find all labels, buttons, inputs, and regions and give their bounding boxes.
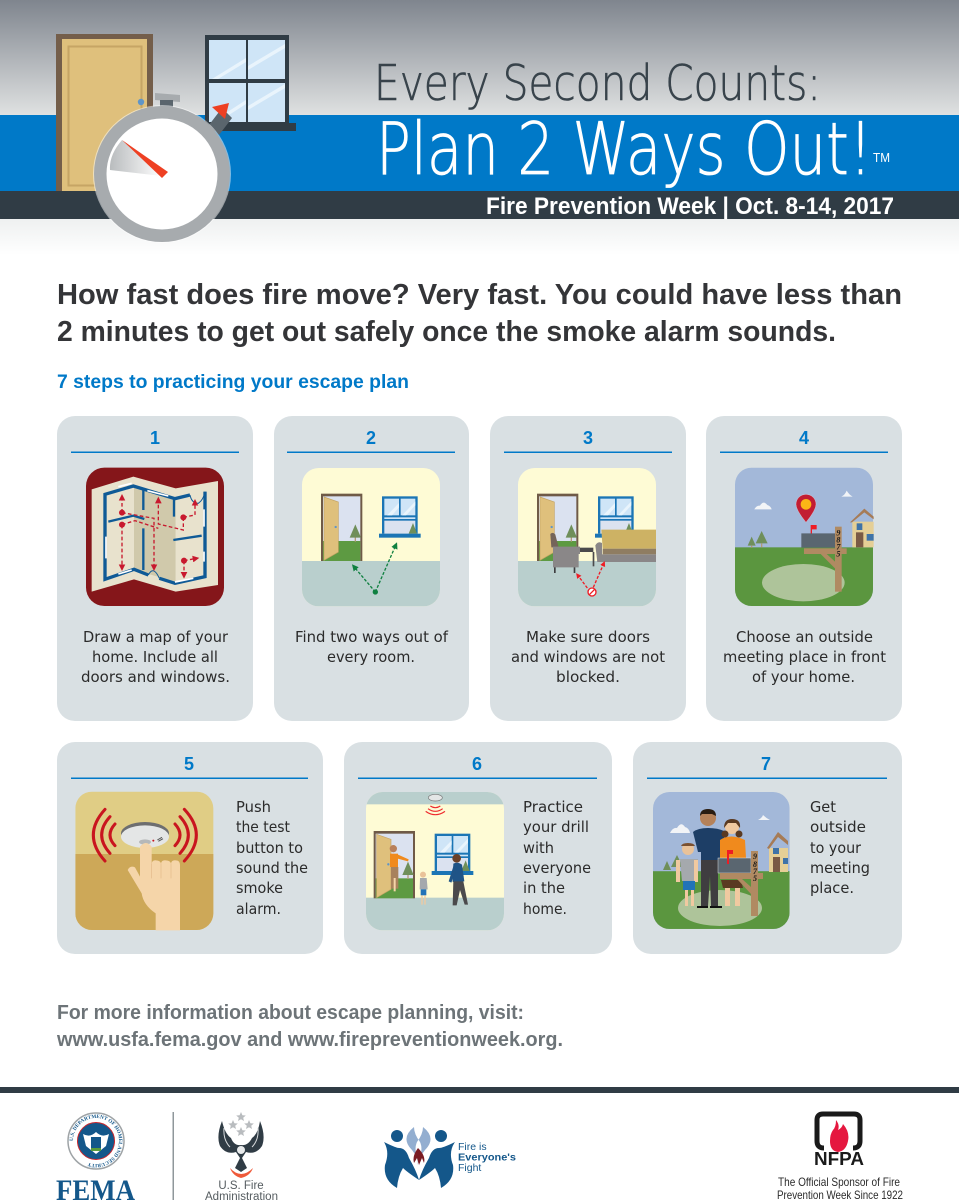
step 1 text xyxy=(81,628,230,686)
logo: DHS seal and FEMA: U.S. DEPARTMENT OF HOMELAND SECURITY xyxy=(70,1114,122,1168)
step 1 text: Draw a map of your xyxy=(83,628,229,646)
logo: Fire is Everyone's Fight: Fire is xyxy=(458,1141,487,1153)
title: Every Second Counts: xyxy=(374,55,821,112)
panel: step 5: 5 xyxy=(184,754,194,774)
step 7 text: meeting xyxy=(810,859,870,877)
icon: family at meeting place: 9 xyxy=(753,852,757,861)
step 6 text: Practice xyxy=(523,798,583,816)
step 7 text: to your xyxy=(810,839,862,857)
title xyxy=(374,55,890,191)
step 4 text: of your home. xyxy=(752,668,855,686)
step 3 text: blocked. xyxy=(556,668,620,686)
step 4 text: Choose an outside xyxy=(736,628,873,646)
more information text: www.usfa.fema.gov and www.firepreventionweek.org. xyxy=(56,1028,563,1051)
step 4 text xyxy=(723,628,886,686)
father xyxy=(701,860,718,906)
panel: step 7 xyxy=(633,742,902,954)
panel: step 6 xyxy=(344,742,612,954)
logo divider xyxy=(172,1112,174,1200)
panel: step 5 xyxy=(57,742,323,954)
logo: Fire is Everyone's Fight: Everyone's xyxy=(458,1152,516,1164)
icon: family at meeting place: 7 xyxy=(753,867,758,876)
intro text: How fast does fire move? Very fast. You could have less than xyxy=(57,279,902,311)
date banner: Fire Prevention Week | Oct. 8-14, 2017 xyxy=(486,193,894,220)
panel: step 4: 4 xyxy=(799,428,809,448)
icon: stopwatch with arrow xyxy=(93,93,232,243)
logo: U.S. Fire Administration: U.S. Fire xyxy=(218,1180,264,1192)
step 7 text xyxy=(810,798,870,897)
panel: step 7: 7 xyxy=(761,754,771,774)
logo: Fire is Everyone's Fight: Fight xyxy=(458,1162,481,1174)
step 6 text: your drill xyxy=(523,818,589,836)
icon: meeting place: 7 xyxy=(836,543,841,552)
step 2 text xyxy=(295,628,449,666)
mother xyxy=(721,880,743,888)
step 2 text: Find two ways out of xyxy=(295,628,449,646)
step 6 text: with xyxy=(523,839,554,857)
intro text: 2 minutes to get out safely once the smoke alarm sounds. xyxy=(57,316,836,348)
icon: smoke alarm test xyxy=(75,792,215,930)
step 1 text: doors and windows. xyxy=(81,668,230,686)
step 5 text: smoke xyxy=(236,879,283,897)
header background xyxy=(0,0,959,255)
logo: U.S. Fire Administration xyxy=(205,1112,278,1200)
panel: step 2: 2 xyxy=(366,428,376,448)
footer rule xyxy=(0,1087,959,1093)
step 3 text: and windows are not xyxy=(511,648,665,666)
subheading: 7 steps to practicing your escape plan xyxy=(57,371,409,393)
logo: NFPA: The Official Sponsor of Fire xyxy=(778,1175,900,1189)
icon: meeting place: 5 xyxy=(836,550,840,559)
logo: NFPA: NFPA xyxy=(814,1149,864,1169)
son xyxy=(682,843,694,855)
icon: room with two exits xyxy=(302,468,440,606)
panel: step 6: 6 xyxy=(472,754,482,774)
logo: DHS seal and FEMA xyxy=(56,1112,135,1200)
icon: door xyxy=(56,34,153,191)
panel: step 3: 3 xyxy=(583,428,593,448)
panel: step 1: 1 xyxy=(150,428,160,448)
step 7 text: place. xyxy=(810,879,854,897)
more information text xyxy=(56,1001,563,1051)
icon: blocked exits xyxy=(518,468,656,606)
step 5 text: the test xyxy=(236,818,290,836)
icon: meeting place: 9 xyxy=(836,528,840,537)
panel: step 3 xyxy=(490,416,686,721)
icon: family at meeting place: 5 xyxy=(753,874,757,883)
step 5 text: button to xyxy=(236,839,303,857)
icon: family practicing drill xyxy=(366,792,504,930)
step 6 text: everyone xyxy=(523,859,591,877)
icon: family at meeting place: 8 xyxy=(753,860,757,869)
step 3 text xyxy=(511,628,665,686)
panel: step 4 xyxy=(706,416,902,721)
title: TM xyxy=(873,150,890,165)
intro text xyxy=(57,279,902,348)
icon: window xyxy=(205,35,296,131)
step 7 text: outside xyxy=(810,818,866,836)
icon: family at meeting place xyxy=(653,792,790,929)
icon: meeting place: 8 xyxy=(836,536,840,545)
step 3 text: Make sure doors xyxy=(526,628,650,646)
step 6 text xyxy=(523,798,591,918)
step 2 text: every room. xyxy=(327,648,415,666)
icon: escape map xyxy=(86,468,224,606)
step 5 text: sound the xyxy=(236,859,308,877)
step 6 text: in the xyxy=(523,879,565,897)
step 5 text: Push xyxy=(236,798,271,816)
more information text: For more information about escape planning, visit: xyxy=(57,1001,524,1024)
mailbox xyxy=(718,858,751,873)
step 6 text: home. xyxy=(523,900,567,918)
logo: NFPA xyxy=(777,1114,903,1200)
step 5 text: alarm. xyxy=(236,900,281,918)
panel: step 2 xyxy=(274,416,469,721)
logo: Fire is Everyone's Fight xyxy=(384,1127,516,1188)
step 4 text: meeting place in front xyxy=(723,648,886,666)
step 7 text: Get xyxy=(810,798,836,816)
step 5 text xyxy=(236,798,308,918)
icon: meeting place xyxy=(735,468,874,606)
panel: step 1 xyxy=(57,416,253,721)
step 1 text: home. Include all xyxy=(92,648,218,666)
